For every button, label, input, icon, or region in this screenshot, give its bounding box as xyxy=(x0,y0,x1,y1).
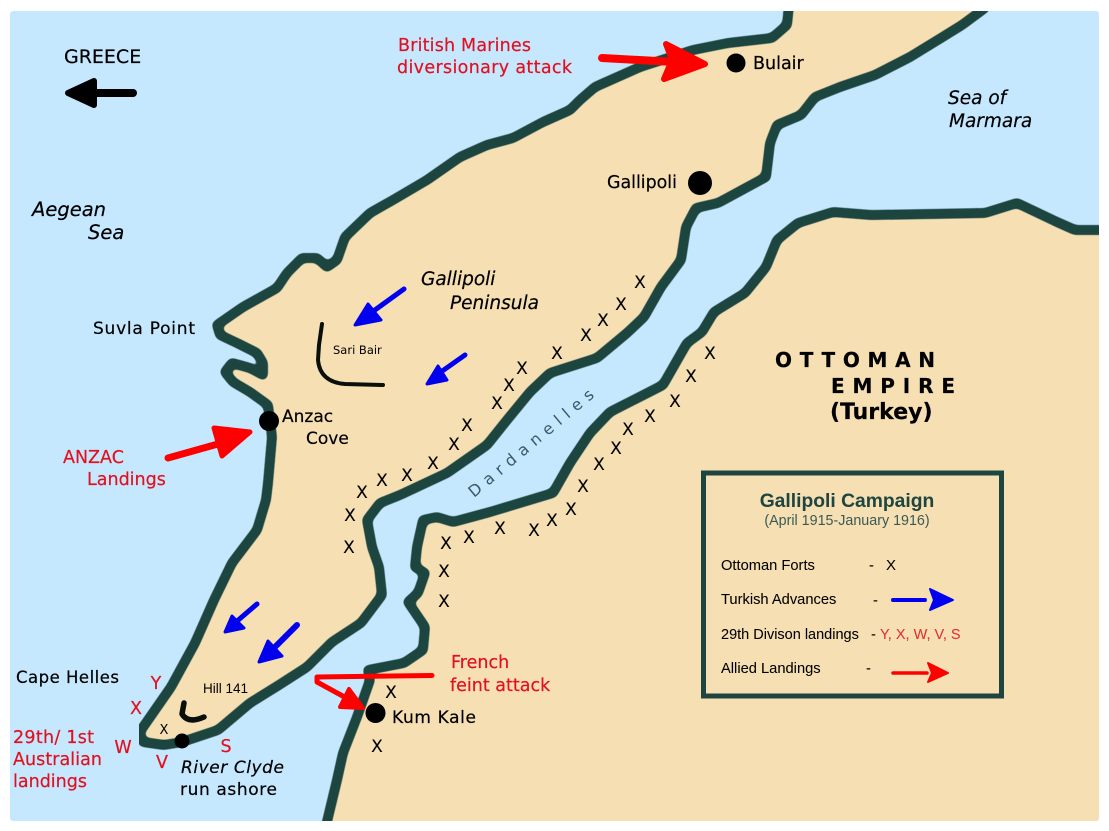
legend row: 29th Division landings: - xyxy=(871,627,876,643)
legend row: 29th Division landings xyxy=(721,627,961,643)
settlement: Gallipoli xyxy=(607,171,712,195)
Ottoman forts: mainland shore: X xyxy=(438,592,450,612)
legend title: Gallipoli Campaign xyxy=(760,491,934,512)
settlement: Anzac Cove: Anzac xyxy=(282,407,333,427)
arrow: Turkish advance 4 xyxy=(259,625,297,662)
label: Sea of Marmara xyxy=(948,88,1032,132)
Ottoman forts: mainland shore: X xyxy=(622,420,634,440)
settlement: Anzac Cove xyxy=(259,407,349,449)
legend row: Ottoman forts: - xyxy=(869,558,874,574)
Ottoman forts: peninsula shore: X xyxy=(503,376,515,396)
label: Sea of Marmara: Sea of xyxy=(948,88,1009,109)
label: Gallipoli Peninsula: Gallipoli xyxy=(421,269,496,290)
Ottoman forts: mainland shore: X xyxy=(669,392,681,412)
ridge: Hill 141 xyxy=(182,703,204,720)
Ottoman forts: mainland shore xyxy=(438,344,716,612)
label: Ottoman Empire: EMPIRE xyxy=(831,374,955,398)
landing beach labels: Y xyxy=(150,674,162,694)
land: Gallipoli peninsula xyxy=(139,5,985,745)
label: Ottoman Empire: OTTOMAN xyxy=(775,348,935,372)
Ottoman forts: mainland shore: X xyxy=(577,477,589,497)
Ottoman forts: mainland shore: X xyxy=(685,367,697,387)
legend row: Ottoman forts: X xyxy=(886,557,896,574)
settlement: Gallipoli: Gallipoli xyxy=(607,173,677,193)
label: Hill 141: Hill 141 xyxy=(203,681,248,696)
arrow: British Marines xyxy=(602,44,705,79)
Ottoman forts: peninsula shore: X xyxy=(427,454,439,474)
label: Sari Bair: Sari Bair xyxy=(333,343,382,357)
coastline: mainland shore xyxy=(325,203,1105,830)
label: French feint attack: feint attack xyxy=(450,676,551,696)
Ottoman forts: mainland shore: X xyxy=(494,519,506,539)
settlement: Kum Kale xyxy=(366,703,476,728)
Ottoman forts: mainland shore: X xyxy=(463,528,475,548)
fort: Cape Helles: X xyxy=(160,723,169,738)
label: Dardanelles strait: Dardanelles xyxy=(464,385,598,501)
label: Ottoman Empire: (Turkey) xyxy=(830,400,933,425)
landing beach labels: W xyxy=(114,738,132,758)
settlement: Bulair xyxy=(726,54,805,74)
legend row: Turkish advances xyxy=(721,589,953,610)
Ottoman forts: mainland shore: X xyxy=(593,455,605,475)
panel: legend xyxy=(704,473,1002,696)
label: Gallipoli Peninsula xyxy=(421,269,539,314)
label: Greece: GREECE xyxy=(64,46,141,68)
Ottoman forts: mainland shore: X xyxy=(546,511,558,531)
arrow: Turkish advance 2 xyxy=(427,355,465,384)
arrow: Turkish advance 3 xyxy=(225,604,257,632)
Ottoman forts: peninsula shore: X xyxy=(401,466,413,486)
Ottoman forts: Kum Kale: X xyxy=(371,737,383,757)
label: Ottoman Empire xyxy=(775,348,955,425)
settlement: Anzac Cove: Cove xyxy=(306,429,349,449)
legend row: Allied landings xyxy=(721,661,948,682)
Ottoman forts: mainland shore: X xyxy=(438,562,450,582)
landing beach labels xyxy=(114,674,232,773)
Ottoman forts: peninsula shore: X xyxy=(597,311,609,331)
land: Ottoman mainland xyxy=(325,203,1105,830)
Ottoman forts: peninsula shore: X xyxy=(491,394,503,414)
legend row: Turkish advances: - xyxy=(873,593,878,609)
arrow: towards Greece xyxy=(68,81,133,105)
label: 29th / 1st Australian landings: 29th/ 1st xyxy=(13,728,94,748)
label: Sea of Marmara: Marmara xyxy=(949,111,1032,132)
legend subtitle: (April 1915-January 1916) xyxy=(764,513,930,529)
Ottoman forts: peninsula shore: X xyxy=(376,471,388,491)
label: Aegean Sea: Sea xyxy=(88,221,124,244)
label: Aegean Sea xyxy=(30,198,124,244)
Ottoman forts: peninsula shore: X xyxy=(634,273,646,293)
label: British Marines: diversionary attack xyxy=(397,58,573,78)
label: River Clyde run ashore: River Clyde xyxy=(181,758,284,778)
Ottoman forts: mainland shore: X xyxy=(528,521,540,541)
Ottoman forts: Kum Kale xyxy=(371,683,397,757)
arrow: ANZAC landings xyxy=(168,428,250,458)
label: Aegean Sea: Aegean xyxy=(30,198,106,221)
Ottoman forts: peninsula shore: X xyxy=(461,416,473,436)
coastline: peninsula north-west shore xyxy=(139,5,985,745)
Ottoman forts: mainland shore: X xyxy=(704,344,716,364)
Ottoman forts: peninsula shore: X xyxy=(344,506,356,526)
label: 29th / 1st Australian landings: landings xyxy=(13,772,87,792)
legend row: Ottoman forts: Ottoman Forts xyxy=(721,558,815,574)
label: ANZAC Landings: ANZAC xyxy=(63,448,124,468)
landing beach labels: X xyxy=(130,699,142,719)
Ottoman forts: peninsula shore xyxy=(343,273,646,558)
Ottoman forts: peninsula shore: X xyxy=(343,538,355,558)
label: 29th / 1st Australian landings xyxy=(13,728,102,792)
Ottoman forts: mainland shore: X xyxy=(565,500,577,520)
settlement: Kum Kale: Kum Kale xyxy=(392,708,476,728)
Ottoman forts: peninsula shore: X xyxy=(551,344,563,364)
label: ANZAC Landings xyxy=(63,448,166,490)
label: British Marines: British Marines xyxy=(398,36,531,56)
settlement: River Clyde landing point xyxy=(174,734,190,748)
Ottoman forts: peninsula shore: X xyxy=(448,435,460,455)
legend row: Allied landings: - xyxy=(866,661,871,677)
label: Suvla Point: Suvla Point xyxy=(93,319,195,339)
Ottoman forts: peninsula shore: X xyxy=(516,359,528,379)
Ottoman forts: peninsula shore: X xyxy=(615,295,627,315)
legend row: Turkish advances: Turkish Advances xyxy=(721,592,836,608)
landing beach labels: V xyxy=(156,753,168,773)
landing beach labels: S xyxy=(220,737,232,757)
label: River Clyde run ashore xyxy=(180,758,284,800)
Ottoman forts: mainland shore: X xyxy=(610,439,622,459)
label: British Marines xyxy=(397,36,573,78)
legend row: Allied landings: Allied Landings xyxy=(721,661,821,677)
label: French feint attack xyxy=(450,653,551,696)
settlement: Bulair: Bulair xyxy=(753,54,805,74)
Ottoman forts: peninsula shore: X xyxy=(580,326,592,346)
ridge: Sari Bair xyxy=(318,324,383,385)
arrow: French feint attack xyxy=(317,676,432,708)
Ottoman forts: mainland shore: X xyxy=(644,407,656,427)
label: French feint attack: French xyxy=(451,653,509,673)
legend row: Ottoman forts xyxy=(721,557,896,574)
Ottoman forts: mainland shore: X xyxy=(440,534,452,554)
label: ANZAC Landings: Landings xyxy=(87,470,166,490)
Ottoman forts: peninsula shore: X xyxy=(356,483,368,503)
Ottoman forts: Kum Kale: X xyxy=(385,683,397,703)
label: Cape Helles: Cape Helles xyxy=(16,668,119,687)
label: 29th / 1st Australian landings: Australian xyxy=(13,750,102,770)
arrow: Turkish advance 1 xyxy=(355,289,404,325)
label: Gallipoli Peninsula: Peninsula xyxy=(450,293,539,314)
legend row: 29th Division landings: 29th Divison landings xyxy=(721,627,859,643)
label: River Clyde run ashore: run ashore xyxy=(180,780,277,800)
legend row: 29th Division landings: Y, X, W, V, S xyxy=(880,627,961,643)
